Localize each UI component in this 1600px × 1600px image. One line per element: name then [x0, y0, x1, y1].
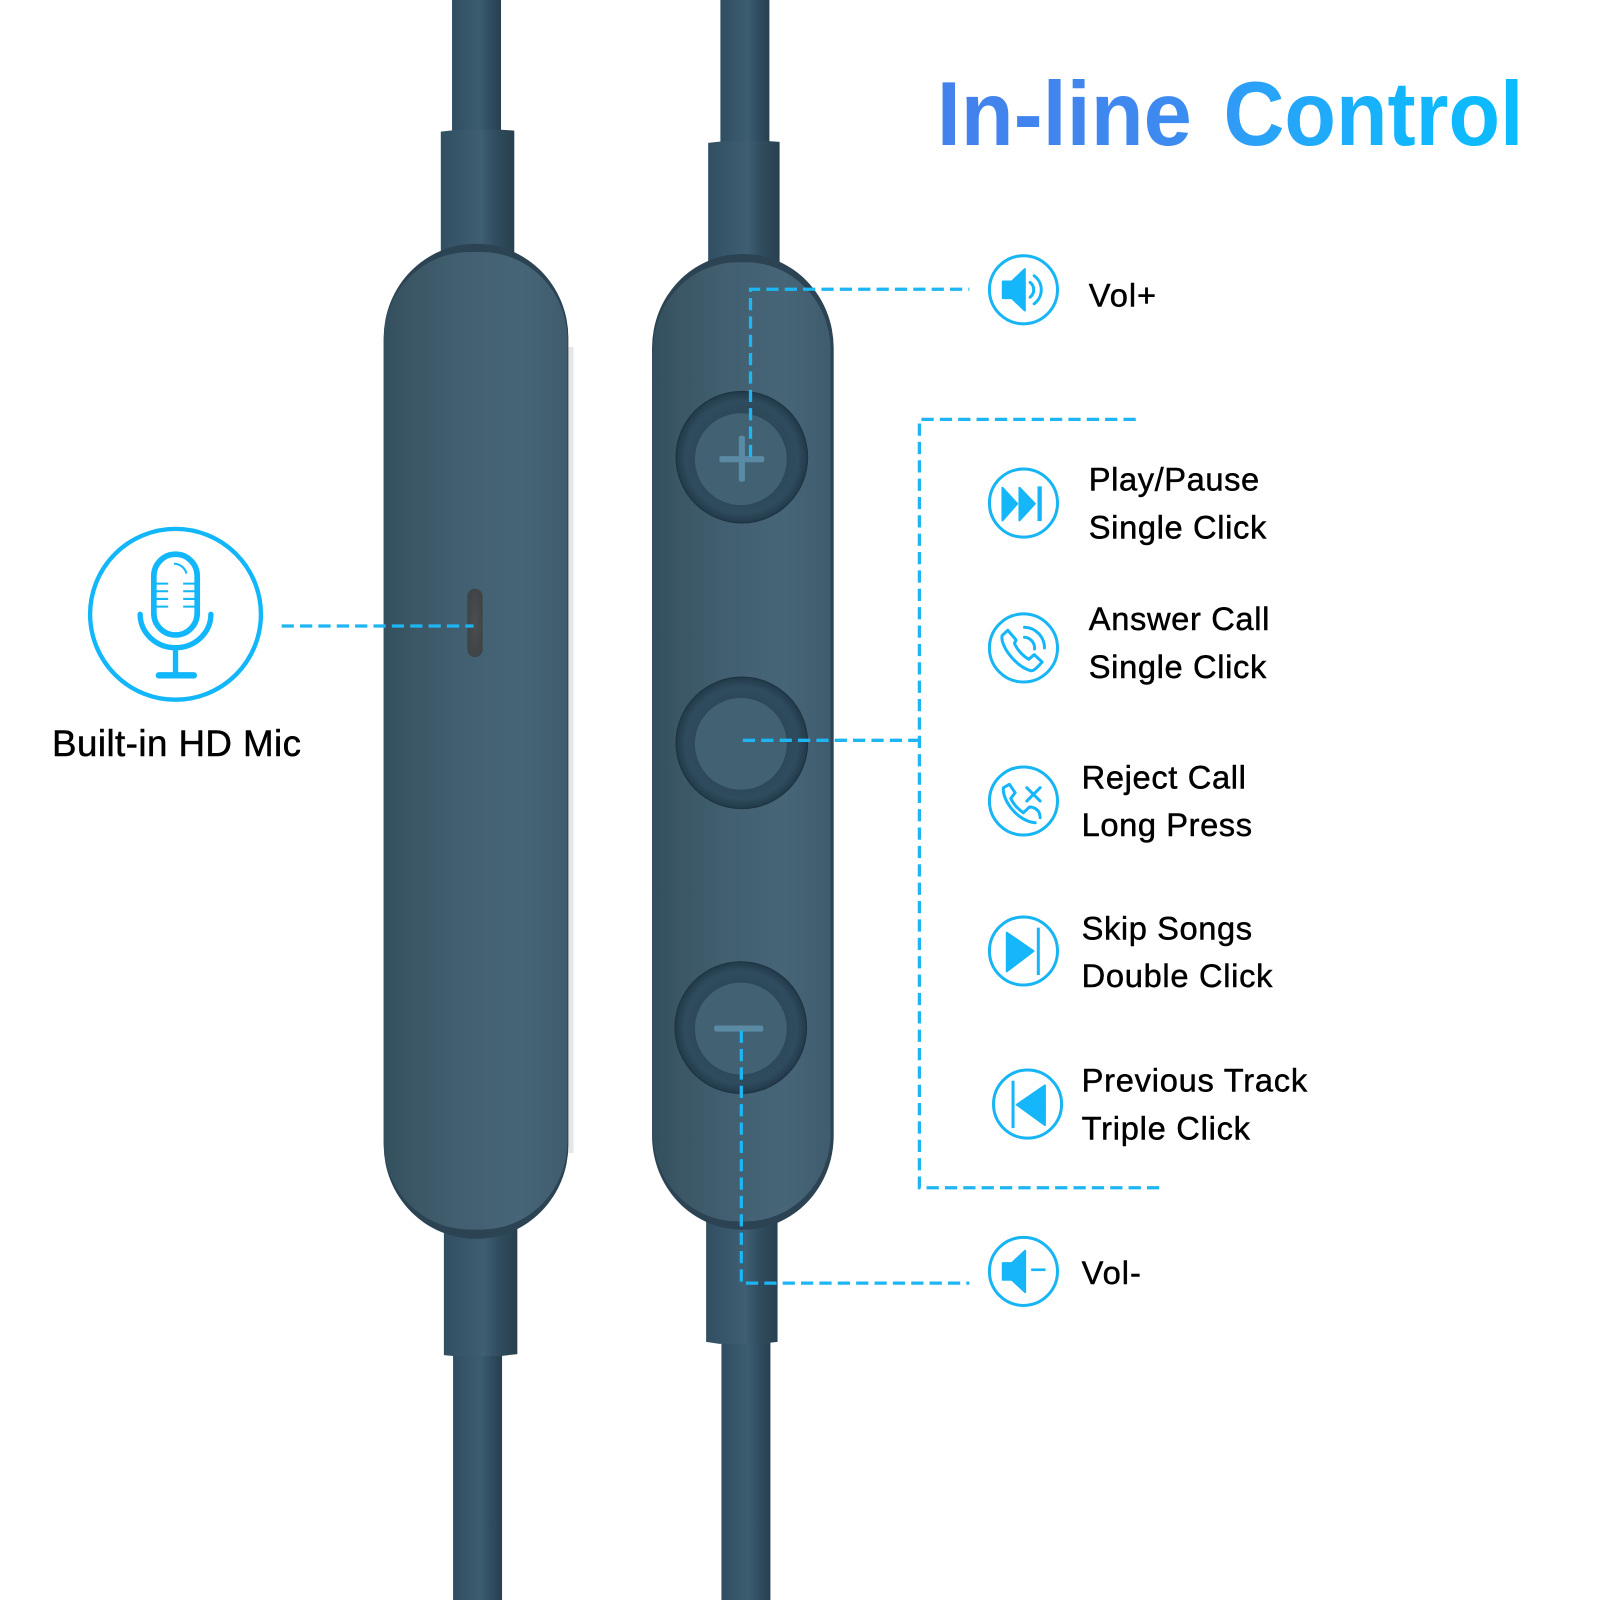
- connector: multifunction button: [743, 739, 919, 742]
- label: Skip Songs: [1082, 909, 1273, 994]
- label: Reject Call: [1082, 758, 1252, 843]
- label: Answer Call: [1089, 600, 1269, 685]
- right remote cable top: [708, 0, 780, 268]
- icon: volume down: [989, 1237, 1058, 1305]
- label: Answer Call: Answer Call: [1089, 600, 1269, 637]
- icon: skip songs: [989, 917, 1058, 985]
- left remote body: [384, 244, 573, 1239]
- volume down button: [674, 961, 807, 1094]
- label: Skip Songs: Skip Songs: [1082, 909, 1252, 946]
- left remote cable bottom: [444, 1224, 517, 1600]
- icon: answer call: [989, 614, 1058, 682]
- label: Previous Track: Previous Track: [1082, 1061, 1308, 1098]
- connector: mic: [282, 624, 473, 628]
- icon: reject call: [989, 767, 1058, 835]
- label: Previous Track: Triple Click: [1082, 1109, 1251, 1146]
- microphone slit: [467, 589, 483, 657]
- label: Reject Call: Reject Call: [1082, 758, 1246, 795]
- left remote cable top: [441, 0, 514, 257]
- icon: play/pause: [989, 469, 1058, 537]
- label: Previous Track: [1082, 1061, 1308, 1146]
- icon: microphone: [90, 529, 261, 700]
- label: Reject Call: Long Press: [1082, 806, 1252, 843]
- title: In-line: [937, 64, 1192, 165]
- title: [937, 64, 1523, 165]
- label: Play/Pause: Play/Pause: [1089, 460, 1259, 497]
- multifunction button: [676, 677, 808, 809]
- label: Vol+: Vol+: [1089, 277, 1156, 314]
- volume up button: [676, 391, 808, 523]
- label: Play/Pause: [1089, 460, 1267, 545]
- connector: volume up: [751, 289, 969, 457]
- right remote body: [652, 254, 834, 1230]
- icon: previous track: [994, 1070, 1062, 1138]
- mic label: Built-in HD Mic: [52, 723, 301, 764]
- connector: volume down: [741, 1031, 969, 1283]
- connector: multifunction bracket: [919, 419, 1161, 1188]
- label: Answer Call: Single Click: [1089, 648, 1267, 685]
- label: Play/Pause: Single Click: [1089, 508, 1267, 545]
- icon: volume up: [989, 256, 1058, 324]
- title: Control: [1223, 64, 1523, 165]
- label: Vol-: Vol-: [1082, 1254, 1141, 1291]
- label: Skip Songs: Double Click: [1082, 957, 1273, 994]
- right remote cable bottom: [706, 1214, 778, 1600]
